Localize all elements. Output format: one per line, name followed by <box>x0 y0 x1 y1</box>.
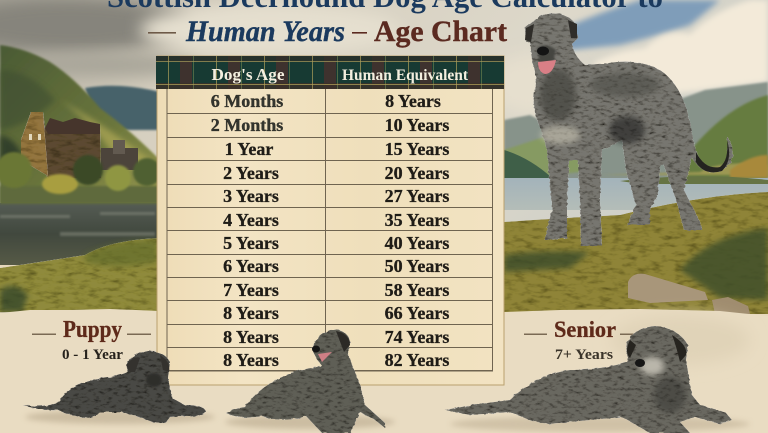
nose <box>537 46 549 56</box>
column: dog's age: 8 Years <box>223 327 279 347</box>
icon: adult dog lying down <box>225 330 395 433</box>
rocks <box>628 274 750 314</box>
left mountains <box>0 45 160 205</box>
icon: standing deerhound <box>525 13 733 246</box>
ears <box>525 20 577 42</box>
castle <box>21 112 138 178</box>
table grid <box>167 89 493 371</box>
label: puppy <box>32 317 151 363</box>
column: human equivalent <box>385 91 449 370</box>
label: senior: 7+ Years <box>555 347 613 363</box>
column: human equivalent: 20 Years <box>385 163 449 183</box>
column: human equivalent: 58 Years <box>385 280 449 300</box>
label: puppy: Puppy <box>63 317 122 343</box>
table header: tartan band <box>156 56 504 89</box>
column: dog's age <box>211 91 283 370</box>
tongue <box>538 60 556 74</box>
column: dog's age: 8 Years <box>223 350 279 370</box>
icon: senior dog lying down <box>445 326 750 433</box>
column: dog's age: 3 Years <box>223 186 279 206</box>
parchment shading <box>610 315 750 365</box>
column: human equivalent: 27 Years <box>385 186 449 206</box>
column: human equivalent: 10 Years <box>385 115 449 135</box>
label: senior: Senior <box>554 317 616 342</box>
background: sky <box>0 0 768 240</box>
label: senior <box>524 317 640 363</box>
column: dog's age: 2 Months <box>211 115 283 135</box>
age chart table <box>156 56 504 385</box>
column: dog's age: 2 Years <box>223 163 279 183</box>
title line 2: Human Years <box>185 15 345 48</box>
label: puppy: 0 - 1 Year <box>62 347 123 363</box>
right mountains <box>504 82 768 180</box>
column: dog's age: 4 Years <box>223 210 279 230</box>
tail tip <box>696 140 729 172</box>
column: human equivalent: 35 Years <box>385 210 449 230</box>
column: dog's age: 8 Years <box>223 303 279 323</box>
column: human equivalent: 50 Years <box>385 256 449 276</box>
column: dog's age: 7 Years <box>223 280 279 300</box>
lakes <box>0 176 768 265</box>
foreground grass <box>0 192 768 314</box>
column: human equivalent: 8 Years <box>385 91 441 111</box>
column: dog's age: 1 Year <box>225 139 273 159</box>
title line 2: Age Chart <box>374 15 507 48</box>
column: dog's age: 5 Years <box>223 233 279 253</box>
table paper <box>157 56 504 385</box>
title <box>107 0 663 48</box>
column: human equivalent: 40 Years <box>385 233 449 253</box>
muzzle <box>537 45 556 66</box>
icon: puppy lying down <box>22 351 215 424</box>
column: human equivalent: 82 Years <box>385 350 449 370</box>
column: human equivalent: 66 Years <box>385 303 449 323</box>
table header: tartan band: Dog's Age <box>212 65 285 84</box>
fur shading <box>540 69 660 144</box>
column: human equivalent: 15 Years <box>385 139 449 159</box>
parchment band <box>0 309 768 433</box>
column: dog's age: 6 Months <box>211 91 283 111</box>
column: human equivalent: 74 Years <box>385 327 449 347</box>
table header: tartan band: Human Equivalent <box>342 67 469 84</box>
left shoreline bushes <box>0 152 161 204</box>
column: dog's age: 6 Years <box>223 256 279 276</box>
title line 2 <box>148 15 507 48</box>
